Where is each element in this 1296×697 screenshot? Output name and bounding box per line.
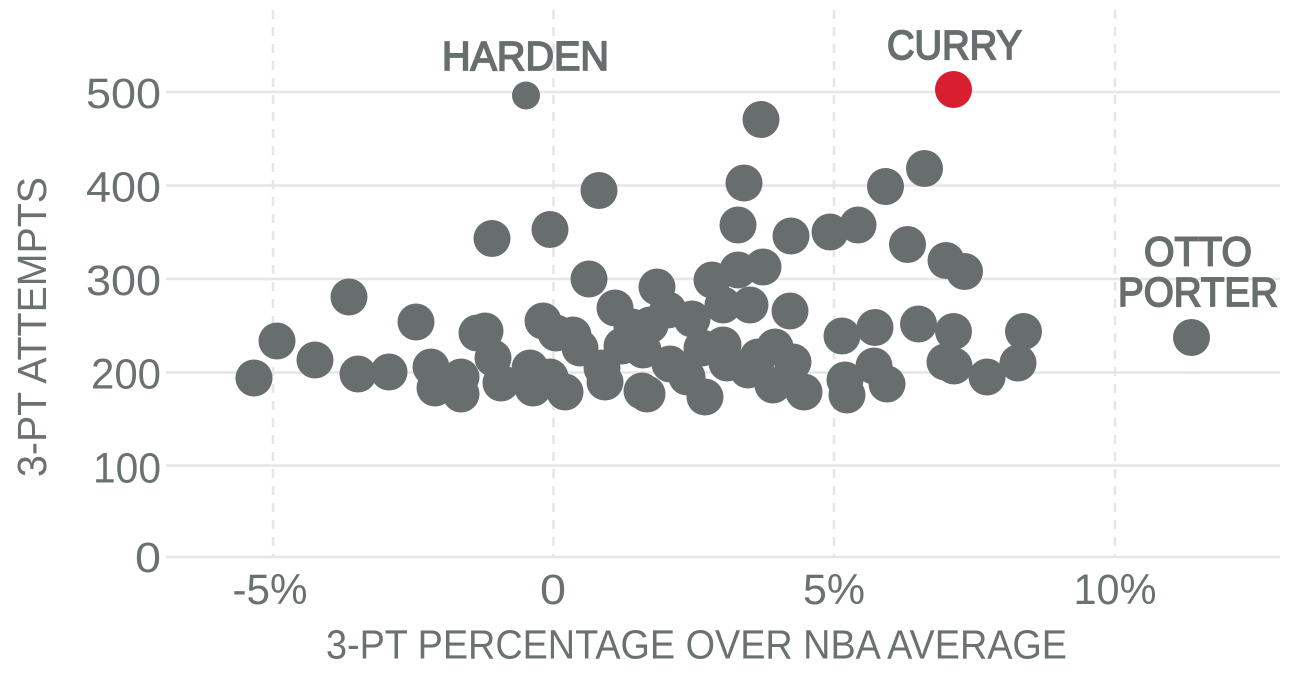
x-axis tick labels: -5%: [232, 566, 308, 614]
label: Harden: HARDEN: [442, 33, 609, 79]
y-axis title: 3-PT ATTEMPTS: [9, 177, 55, 477]
label: Otto Porter: OTTO: [1144, 228, 1252, 274]
player dots: [236, 101, 1210, 416]
y-axis tick labels: 100: [93, 444, 161, 492]
label: Otto Porter: [1118, 228, 1278, 315]
y-axis tick labels: 0: [135, 534, 161, 582]
Harden dot: [512, 82, 540, 110]
x-axis tick labels: 5%: [803, 566, 865, 614]
x-axis title: 3-PT PERCENTAGE OVER NBA AVERAGE: [326, 622, 1067, 668]
y-axis tick labels: 500: [86, 70, 161, 118]
label: Otto Porter: PORTER: [1118, 269, 1278, 315]
x-axis tick labels: 0: [540, 566, 566, 614]
label: Curry: CURRY: [887, 22, 1022, 68]
Curry dot: [935, 71, 972, 108]
y-axis tick labels: 300: [86, 257, 161, 305]
y-axis tick labels: [86, 70, 161, 582]
y-axis tick labels: 200: [91, 350, 161, 398]
x-axis tick labels: 10%: [1074, 566, 1156, 614]
y-axis tick labels: 400: [86, 164, 161, 212]
x-axis tick labels: [232, 566, 1156, 614]
